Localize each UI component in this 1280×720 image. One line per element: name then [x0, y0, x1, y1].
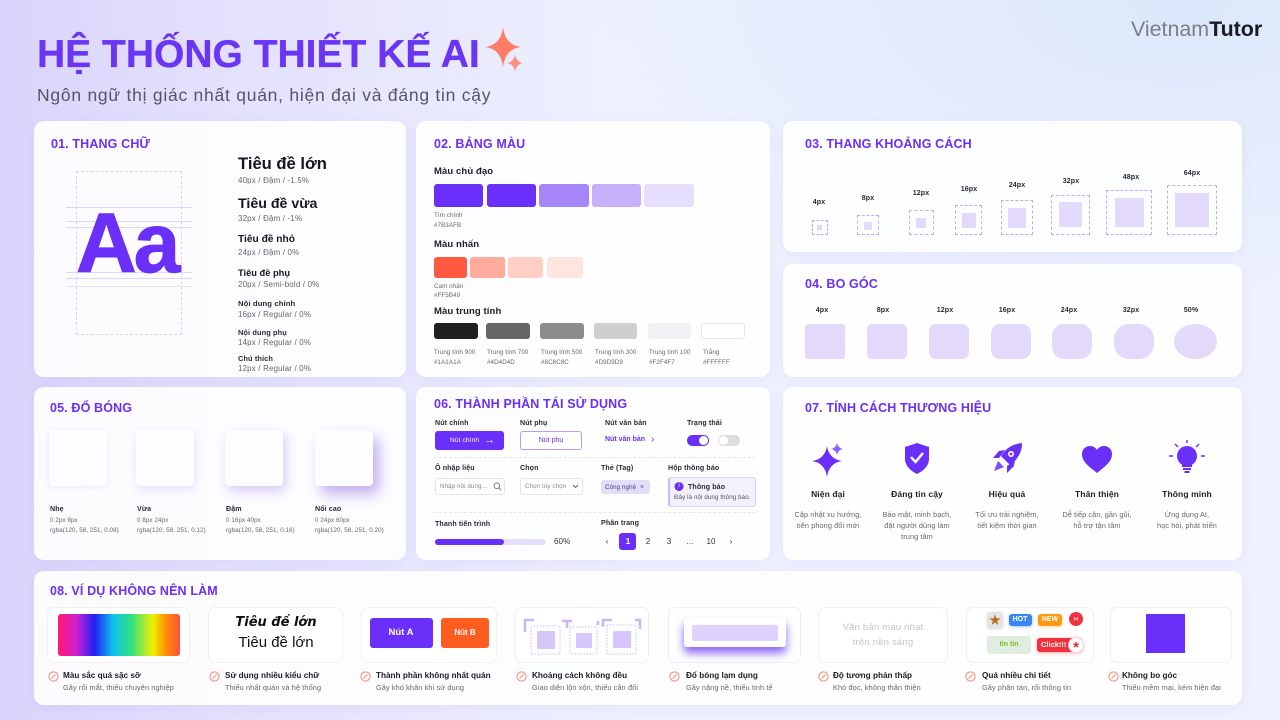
component: text button: Nút văn bản [605, 419, 647, 427]
shadow samples: rgba(120, 58, 251, 0.08) [50, 527, 119, 534]
icon: heart [1082, 446, 1112, 473]
example: inconsistent components: Nút B [454, 628, 476, 637]
type scale list: 20px / Semi-bold / 0% [238, 280, 319, 289]
component: alert: i [678, 483, 680, 489]
component: pagination: › [730, 537, 732, 546]
spacing samples: 8px [862, 194, 874, 202]
panel: typography scale [34, 121, 406, 377]
trait: trustworthy: Bảo mật, minh bạch, [883, 510, 951, 519]
neutral colours: Màu trung tính [434, 306, 501, 317]
type scale list: 14px / Regular / 0% [238, 338, 311, 347]
component: pagination: ‹ [606, 537, 608, 546]
type scale list: Tiêu đề lớn [238, 154, 327, 173]
example: too many details: HOT [1013, 616, 1027, 623]
icon: sparkles [812, 443, 843, 477]
component: pagination: Phân trang [601, 519, 639, 527]
trait: smart [1157, 440, 1217, 530]
type scale list: 32px / Đậm / -1% [238, 214, 302, 223]
heading: 07: 07. TÍNH CÁCH THƯƠNG HIỆU [805, 401, 991, 415]
trait: friendly: Dễ tiếp cận, gần gũi, [1062, 510, 1132, 519]
panel: do-not examples [34, 571, 1242, 705]
spacing samples: 64px [1184, 169, 1200, 177]
icon: rocket [993, 443, 1022, 473]
trait: modern [794, 443, 862, 530]
primary colours [434, 166, 694, 229]
component: secondary button: Nút phụ [520, 419, 548, 427]
heading: 08: 08. VÍ DỤ KHÔNG NÊN LÀM [50, 584, 218, 598]
component: tag: Công nghệ [605, 484, 636, 491]
accent colours: Cam nhấn [434, 283, 463, 290]
accent colours: Màu nhấn [434, 239, 479, 250]
example: no rounded corners [1108, 607, 1232, 692]
icon: shield [905, 443, 929, 474]
component: select: Chọn [520, 464, 539, 472]
shadow samples: Vừa [137, 505, 151, 513]
neutral colours: #1A1A1A [434, 359, 461, 366]
icon: light bulb [1169, 440, 1205, 473]
shadow samples: 0 2px 8px [50, 517, 78, 524]
example: low contrast [818, 607, 948, 692]
component: secondary button [520, 419, 582, 450]
shadow samples [48, 429, 388, 534]
primary colours: #7B3AFB [434, 222, 461, 229]
example: no rounded corners: Không bo góc [1122, 671, 1177, 680]
trait: efficient: tiết kiệm thời gian [977, 521, 1037, 530]
shadow samples: 0 24px 60px [315, 517, 350, 524]
example: low contrast: Văn bản màu nhạt [843, 622, 923, 633]
radius samples: 8px [877, 306, 889, 314]
neutral colours: Trắng [703, 349, 719, 356]
shadow samples: rgba(120, 58, 251, 0.12) [137, 527, 206, 534]
neutral colours: Trung tính 500 [541, 349, 582, 356]
spacing samples: 24px [1009, 181, 1025, 189]
shadow samples: Nổi cao [315, 505, 341, 513]
type scale list: Nội dung chính [238, 299, 295, 308]
component: input: Ô nhập liệu [435, 464, 475, 472]
example: too colourful: Màu sắc quá sặc sỡ [63, 671, 141, 680]
trait: modern: tiên phong đổi mới [797, 521, 859, 530]
example: shadow abuse [668, 607, 801, 692]
heading: 06: 06. THÀNH PHẦN TÁI SỬ DỤNG [434, 397, 627, 411]
example: low contrast: Độ tương phản thấp [833, 671, 912, 680]
component: input: Nhập nội dung... [440, 483, 487, 490]
radius samples: 50% [1184, 306, 1198, 314]
spacing samples: 48px [1123, 173, 1139, 181]
component: toggles: Trạng thái [687, 419, 722, 427]
neutral colours: #F2F4F7 [649, 359, 675, 366]
component: progress bar: Thanh tiến trình [435, 520, 490, 528]
shadow samples: 0 16px 40px [226, 517, 261, 524]
component: tag: Thẻ (Tag) [601, 464, 633, 472]
radius samples: 12px [937, 306, 953, 314]
example: inconsistent components: Gây khó khăn khi sử dụng [376, 683, 464, 692]
component: pagination: 2 [646, 537, 650, 546]
primary colours: Tím chính [434, 212, 462, 219]
type scale list: Tiêu đề nhỏ [238, 234, 295, 245]
trait: friendly: Thân thiện [1075, 489, 1119, 499]
component: alert [668, 464, 756, 507]
trait: trustworthy: Đáng tin cậy [891, 489, 943, 499]
panel: shadows [34, 387, 406, 560]
shadow samples: rgba(120, 58, 251, 0.20) [315, 527, 384, 534]
trait: efficient: Hiệu quả [989, 489, 1025, 499]
panel: spacing scale [783, 121, 1242, 252]
example: too many details: ›‹ [1073, 614, 1079, 623]
example: low contrast: Khó đọc, không thân thiện [833, 683, 921, 692]
example: too many fonts [208, 607, 343, 692]
example: too many fonts: Tiêu đề lớn [235, 615, 317, 630]
accent colours [434, 239, 583, 299]
component: secondary button: Nút phụ [539, 437, 563, 444]
trait: friendly [1062, 446, 1132, 530]
example: too many details: ★ [989, 613, 1001, 627]
example: shadow abuse: Gây nặng nề, thiếu tinh tế [686, 683, 773, 692]
spacing samples: 32px [1063, 177, 1079, 185]
radius samples [805, 306, 1217, 359]
neutral colours: Trung tính 300 [595, 349, 636, 356]
component: pagination [601, 519, 732, 550]
component: progress bar [435, 520, 570, 546]
example: too many details [965, 607, 1094, 692]
example: inconsistent components: Thành phần không nhất quán [376, 671, 491, 680]
neutral colours: #4D4D4D [487, 359, 515, 366]
panel: corner radius [783, 264, 1242, 377]
neutral colours: #D9D9D9 [595, 359, 623, 366]
component: toggles [687, 419, 740, 446]
example: too many details: tin tin [999, 641, 1019, 648]
heading: 04: 04. BO GÓC [805, 277, 878, 291]
example: uneven spacing [515, 607, 649, 692]
component: pagination: ... [687, 537, 693, 546]
heading: 01: 01. THANG CHỮ [51, 137, 150, 151]
example: too many details: Click!!! [1041, 640, 1066, 649]
component: alert: Thông báo [688, 483, 725, 491]
neutral colours: Trung tính 900 [434, 349, 475, 356]
neutral colours: #FFFFFF [703, 359, 730, 366]
trait: modern: Niện đại [811, 489, 845, 499]
component: primary button: Nút chính [450, 437, 479, 444]
component: select: Chọn tùy chọn [525, 483, 566, 490]
component: primary button: → [484, 434, 495, 446]
specimen: Aa with guides: Aa [76, 196, 177, 290]
example: too many fonts: Tiêu đề lớn [238, 634, 314, 651]
type scale list: Chú thích [238, 354, 273, 363]
panel: brand personality [783, 387, 1242, 560]
radius samples: 16px [999, 306, 1015, 314]
shadow samples: 0 8px 24px [137, 517, 168, 524]
example: inconsistent components [360, 607, 497, 692]
example: too colourful: Gây rối mắt, thiếu chuyên nghiệp [63, 683, 174, 692]
example: too many details: NEW [1042, 616, 1058, 623]
type scale list: 16px / Regular / 0% [238, 310, 311, 319]
shadow samples: Nhẹ [50, 505, 64, 513]
spacing samples [812, 169, 1217, 235]
radius samples: 32px [1123, 306, 1139, 314]
accent colours: #FF5B49 [434, 292, 460, 299]
trait: smart: học hỏi, phát triển [1157, 521, 1217, 530]
spacing samples: 12px [913, 189, 929, 197]
example: uneven spacing: Giao diện lộn xộn, thiếu cân đối [532, 683, 638, 692]
type scale list [238, 154, 327, 373]
type scale list: Nội dung phụ [238, 328, 287, 337]
type scale list: 24px / Đậm / 0% [238, 248, 299, 257]
logo: VietnamTutor [1131, 17, 1262, 41]
heading: 05: 05. ĐỔ BÓNG [50, 401, 132, 415]
example: too many details: * [1073, 639, 1079, 656]
component: pagination: 1 [626, 537, 630, 546]
icon: sparkle [485, 27, 523, 72]
component: primary button [435, 419, 504, 450]
component: text button [605, 419, 654, 445]
component: progress bar: 60% [554, 537, 570, 546]
trait: trustworthy: đặt người dùng làm [884, 521, 950, 530]
trait: efficient [975, 443, 1039, 530]
component: text button: Nút văn bản [605, 436, 645, 443]
radius samples: 4px [816, 306, 828, 314]
trait: trustworthy: trung tâm [901, 532, 933, 541]
shadow samples: rgba(120, 58, 251, 0.16) [226, 527, 295, 534]
neutral colours: Trung tính 700 [487, 349, 528, 356]
component: pagination: 10 [706, 537, 716, 546]
subtitle: Ngôn ngữ thị giác nhất quán, hiện đại và đáng tin cậy [37, 85, 491, 105]
heading: 03: 03. THANG KHOẢNG CÁCH [805, 137, 972, 151]
example: shadow abuse: Đổ bóng lạm dụng [686, 671, 758, 680]
neutral colours [434, 306, 745, 366]
panel: reusable components [416, 387, 770, 560]
neutral colours: Trung tính 100 [649, 349, 690, 356]
shadow samples: Đậm [226, 505, 242, 513]
example: too many details: Gây phân tán, rối thông tin [982, 683, 1071, 692]
component: select [520, 464, 583, 495]
component: primary button: Nút chính [435, 419, 469, 427]
trait: friendly: hỗ trợ tận tâm [1073, 521, 1121, 530]
trait: efficient: Tối ưu trải nghiệm, [975, 510, 1039, 519]
component: input [435, 463, 505, 495]
component: alert: Hộp thông báo [668, 464, 719, 472]
radius samples: 24px [1061, 306, 1077, 314]
type scale list: 40px / Đậm / -1.5% [238, 176, 309, 185]
type scale list: Tiêu đề phụ [238, 268, 290, 278]
component: tag [601, 464, 650, 494]
example: too many details: Quá nhiều chi tiết [982, 671, 1051, 680]
type scale list: 12px / Regular / 0% [238, 364, 311, 373]
heading: 02: 02. BẢNG MÀU [434, 137, 525, 151]
component: pagination: 3 [667, 537, 671, 546]
primary colours: Màu chủ đạo [434, 166, 493, 177]
specimen: Aa with guides [66, 171, 192, 335]
trait: trustworthy [883, 443, 951, 541]
example: too many fonts: Sử dụng nhiều kiểu chữ [225, 671, 319, 680]
type scale list: Tiêu đề vừa [238, 196, 317, 212]
example: uneven spacing: Khoảng cách không đều [532, 671, 627, 680]
spacing samples: 4px [813, 198, 825, 206]
spacing samples: 16px [961, 185, 977, 193]
example: no rounded corners: Thiếu mềm mại, kém hiện đại [1122, 683, 1221, 692]
title: HỆ THỐNG THIẾT KẾ AI [37, 33, 480, 76]
component: text button: › [651, 434, 654, 445]
panel: colour palette [416, 121, 770, 377]
example: too many fonts: Thiếu nhất quán và hệ thống [225, 683, 321, 692]
trait: smart: Thông minh [1162, 489, 1212, 499]
example: too colourful [47, 607, 190, 692]
trait: smart: Ứng dụng AI, [1165, 510, 1209, 519]
component: alert: Đây là nội dung thông báo. [674, 494, 751, 501]
example: inconsistent components: Nút A [389, 627, 413, 638]
example: low contrast: trên nền sáng [853, 637, 913, 648]
component: tag: × [640, 484, 644, 491]
trait: modern: Cập nhật xu hướng, [794, 510, 862, 519]
neutral colours: #8C8C8C [541, 359, 569, 366]
